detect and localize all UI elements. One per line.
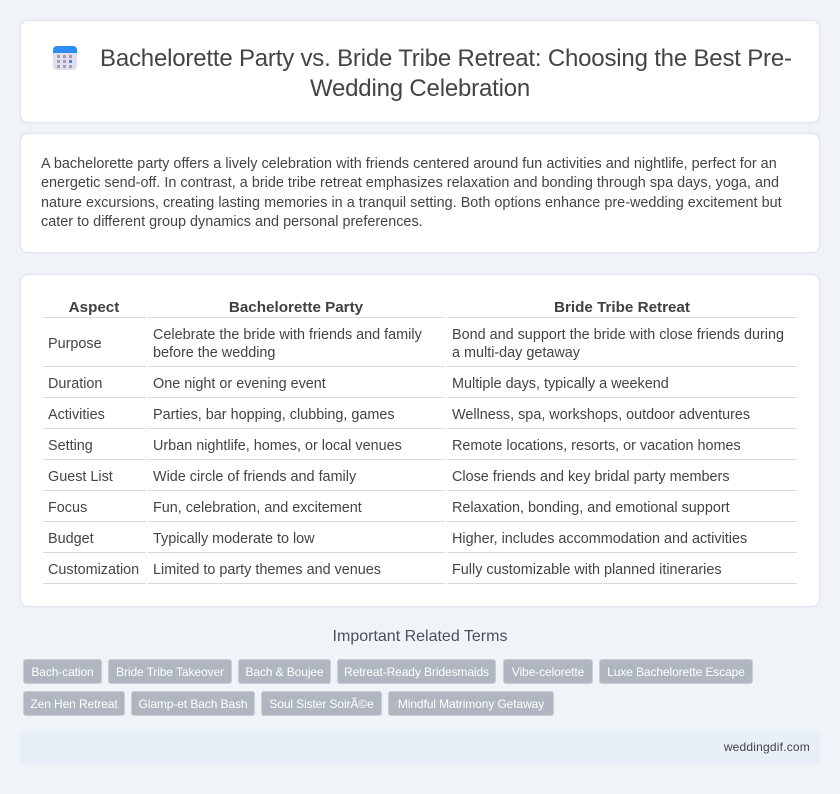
tag: Soul Sister SoirÃ©e <box>269 697 374 711</box>
row: Activities: Parties, bar hopping, clubbing, games <box>153 407 395 423</box>
row: Guest List: Wide circle of friends and family <box>153 469 356 485</box>
tag <box>108 659 232 684</box>
tag <box>599 659 753 684</box>
footer bar <box>20 730 820 764</box>
tag: Mindful Matrimony Getaway <box>398 697 544 711</box>
tag <box>131 691 255 716</box>
tag: Vibe-celorette <box>512 665 584 679</box>
intro text: cater to different group dynamics and personal preferences. <box>41 214 423 230</box>
row: Customization: Customization <box>48 562 139 578</box>
row: Customization: Fully customizable with planned itineraries <box>452 562 722 578</box>
tag <box>337 659 496 684</box>
tag: Bach & Boujee <box>245 665 324 679</box>
row: Setting: Setting <box>48 438 93 454</box>
header: Aspect: Aspect <box>69 299 119 316</box>
row: Focus <box>48 500 730 516</box>
tag: Retreat-Ready Bridesmaids <box>344 665 489 679</box>
row: Duration: One night or evening event <box>153 376 326 392</box>
tag <box>238 659 331 684</box>
title <box>100 45 792 102</box>
row: Budget: Budget <box>48 531 94 547</box>
related terms heading: Important Related Terms <box>333 628 507 645</box>
comparison table panel <box>20 274 820 607</box>
row: Customization <box>48 562 722 578</box>
row: Duration <box>48 376 669 392</box>
comparison table <box>43 299 797 584</box>
header: Bride Tribe Retreat: Bride Tribe Retreat <box>554 299 690 316</box>
tag <box>261 691 382 716</box>
tag <box>23 691 125 716</box>
header: Bachelorette Party: Bachelorette Party <box>229 299 363 316</box>
row: Activities: Activities <box>48 407 105 423</box>
row: Setting: Urban nightlife, homes, or local venues <box>153 438 402 454</box>
row: Guest List <box>48 469 730 485</box>
row: Duration: Multiple days, typically a weekend <box>452 376 669 392</box>
row: Guest List: Guest List <box>48 469 113 485</box>
title: Bachelorette Party vs. Bride Tribe Retreat: Choosing the Best Pre- <box>100 45 792 72</box>
related terms tags <box>23 659 753 716</box>
row: Duration: Duration <box>48 376 102 392</box>
row: Purpose: before the wedding <box>153 345 275 361</box>
row: Focus: Relaxation, bonding, and emotional support <box>452 500 730 516</box>
title: Wedding Celebration <box>310 75 530 102</box>
tag: Luxe Bachelorette Escape <box>607 665 745 679</box>
icon: calendar <box>53 46 77 70</box>
intro text: energetic send-off. In contrast, a bride tribe retreat emphasizes relaxation and bonding through spa days, yoga, and <box>41 175 779 191</box>
tag: Bride Tribe Takeover <box>116 665 224 679</box>
row: Customization: Limited to party themes and venues <box>153 562 381 578</box>
row: Guest List: Close friends and key bridal party members <box>452 469 730 485</box>
row: Budget: Higher, includes accommodation and activities <box>452 531 747 547</box>
row: Purpose: Bond and support the bride with close friends during <box>452 327 784 343</box>
intro text: A bachelorette party offers a lively celebration with friends centered around fun activities and nightlife, perfect for an <box>41 156 777 172</box>
intro text <box>41 156 782 230</box>
row: Focus: Fun, celebration, and excitement <box>153 500 362 516</box>
row: Budget <box>48 531 747 547</box>
header panel <box>20 20 820 123</box>
tag <box>388 691 554 716</box>
row: Purpose: Celebrate the bride with friends and family <box>153 327 422 343</box>
tag <box>503 659 593 684</box>
row: Activities <box>48 407 750 423</box>
row: Budget: Typically moderate to low <box>153 531 315 547</box>
row: Purpose: Purpose <box>48 336 102 352</box>
row: Setting <box>48 438 741 454</box>
row: Activities: Wellness, spa, workshops, outdoor adventures <box>452 407 750 423</box>
footer source: weddingdif.com <box>724 740 810 754</box>
tag: Zen Hen Retreat <box>30 697 118 711</box>
tag: Glamp-et Bach Bash <box>139 697 247 711</box>
row: Focus: Focus <box>48 500 87 516</box>
tag: Bach-cation <box>31 665 94 679</box>
intro panel <box>20 133 820 253</box>
intro text: nature excursions, creating lasting memories in a tranquil setting. Both options enhance pre-wedding excitement but <box>41 195 782 211</box>
row: Purpose <box>48 327 784 361</box>
row: Purpose: a multi-day getaway <box>452 345 580 361</box>
row: Setting: Remote locations, resorts, or vacation homes <box>452 438 741 454</box>
tag <box>23 659 102 684</box>
